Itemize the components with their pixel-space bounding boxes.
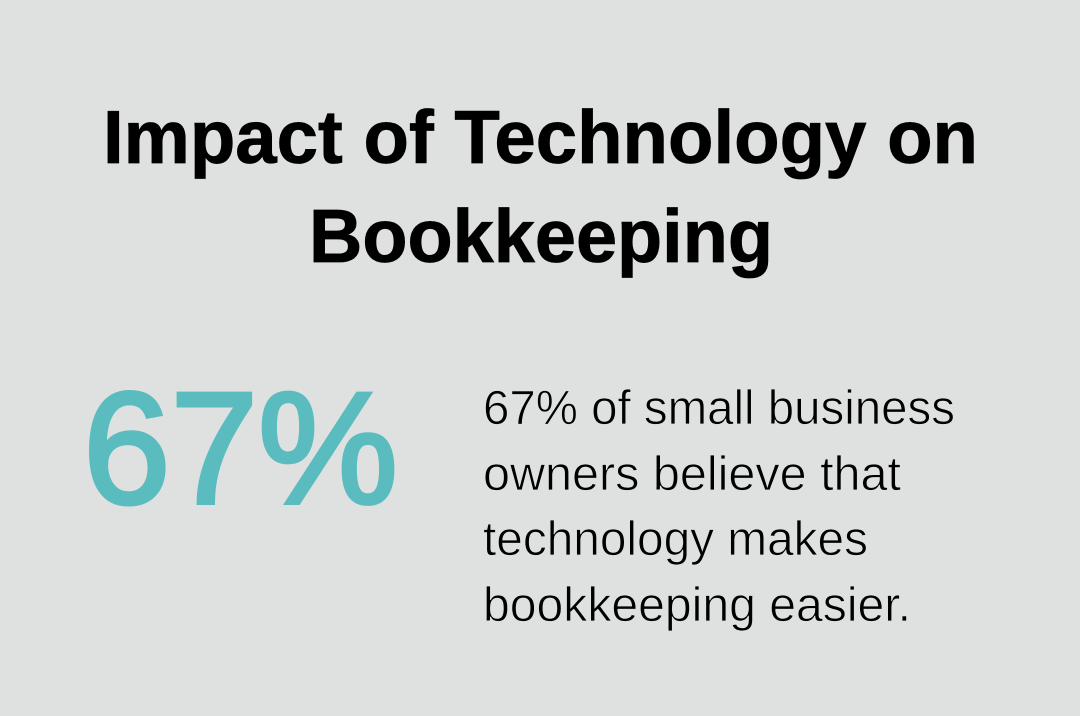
- description text: owners believe that: [483, 448, 901, 501]
- title: Bookkeeping: [309, 194, 773, 278]
- title: [103, 95, 978, 278]
- description text: technology makes: [483, 513, 868, 566]
- description text: 67% of small business: [483, 382, 955, 435]
- big statistic: 67%: 67%: [83, 359, 398, 537]
- description text: [483, 382, 955, 632]
- title: Impact of Technology on: [103, 95, 978, 179]
- description text: bookkeeping easier.: [483, 579, 911, 632]
